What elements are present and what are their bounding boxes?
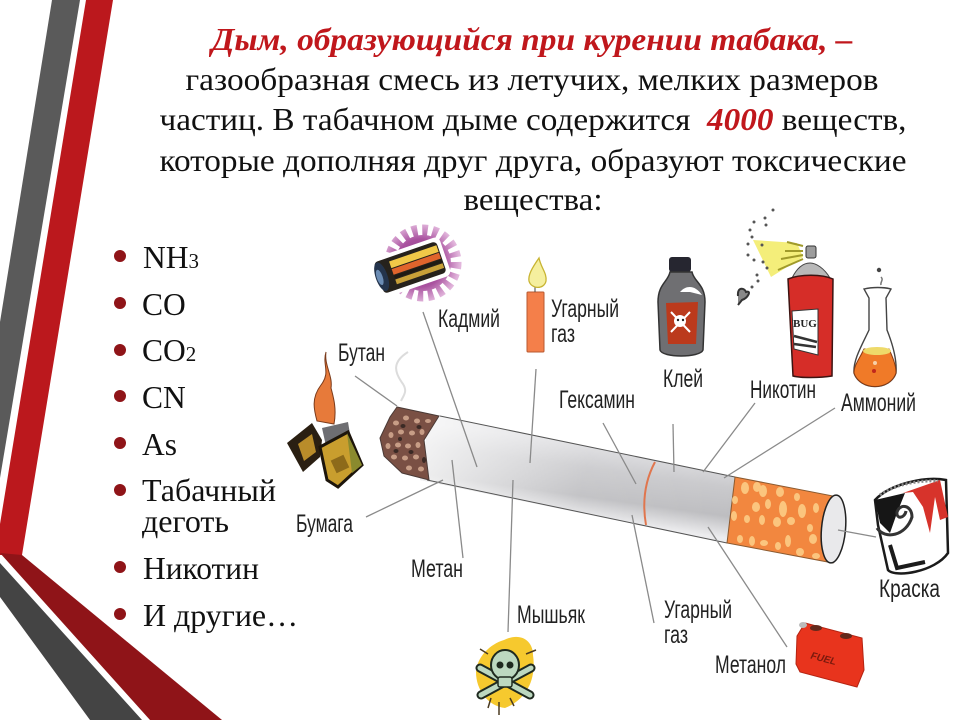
- cigarette component labels: Краска: [879, 575, 940, 603]
- orange ring: [644, 462, 655, 525]
- cigarette component labels: Кадмий: [438, 305, 500, 333]
- cigarette paper: [420, 414, 735, 543]
- bullet list of substances: деготь: [142, 504, 229, 539]
- filter: [727, 477, 833, 563]
- icon: paint can: [875, 479, 948, 573]
- bullet list of substances: CO2: [142, 333, 196, 368]
- decorative corner stripes: [0, 0, 222, 720]
- cigarette component labels: Угарный: [551, 295, 619, 323]
- bullet list of substances: NH3: [143, 240, 199, 275]
- icon: cadmium battery: [369, 230, 456, 299]
- cigarette component labels: Бутан: [338, 339, 385, 367]
- title paragraph: которые дополняя друг друга, образуют токсические: [160, 143, 906, 178]
- icon: lighter with flame: [287, 352, 362, 487]
- leader lines: [355, 312, 876, 647]
- cigarette component labels: Никотин: [750, 376, 816, 404]
- icon: fuel canister: [796, 622, 864, 687]
- cigarette component labels: Угарный: [664, 596, 732, 624]
- cigarette component labels: Метанол: [715, 651, 786, 679]
- bullet list of substances: Никотин: [143, 551, 259, 586]
- cigarette component labels: Бумага: [296, 510, 353, 538]
- cigarette component labels: газ: [664, 621, 688, 649]
- icon: ammonia flask: [854, 268, 896, 386]
- icon: bug spray can: BUG: [793, 318, 817, 330]
- title paragraph: вещества:: [464, 182, 602, 217]
- icon: fuel canister: FUEL: [809, 651, 837, 668]
- bullet list of substances: CN: [142, 380, 186, 415]
- title paragraph: частиц. В табачном дыме содержится 4000 веществ,: [160, 102, 906, 137]
- fly: [738, 289, 749, 305]
- cigarette component labels: [296, 295, 940, 679]
- cigarette component labels: газ: [551, 320, 575, 348]
- cigarette component labels: Метан: [411, 555, 463, 583]
- cigarette component labels: Мышьяк: [517, 601, 586, 629]
- bullet list of substances: CO: [142, 287, 186, 322]
- smoke wisp: [396, 352, 408, 401]
- cigarette component labels: Гексамин: [559, 386, 635, 414]
- bullet list of substances: Табачный: [142, 473, 276, 508]
- title paragraph: [160, 22, 906, 217]
- filter end: [819, 494, 848, 564]
- title paragraph: газообразная смесь из летучих, мелких размеров: [186, 62, 878, 97]
- bullet list of substances: [114, 240, 298, 633]
- burning tobacco tip: [380, 407, 439, 480]
- cigarette component labels: Клей: [663, 365, 703, 393]
- cigarette component labels: Аммоний: [841, 389, 916, 417]
- title paragraph: Дым, образующийся при курении табака, –: [208, 22, 853, 57]
- cigarette: [380, 407, 848, 564]
- icon: glue bottle: [658, 257, 705, 356]
- bullet list of substances: As: [142, 427, 177, 462]
- bullet list of substances: И другие…: [143, 598, 298, 633]
- icon: candle: [527, 258, 546, 352]
- spray mist: [753, 240, 803, 277]
- icon: skull and crossbones (arsenic): [476, 637, 536, 715]
- icon: bug spray can: [738, 208, 833, 378]
